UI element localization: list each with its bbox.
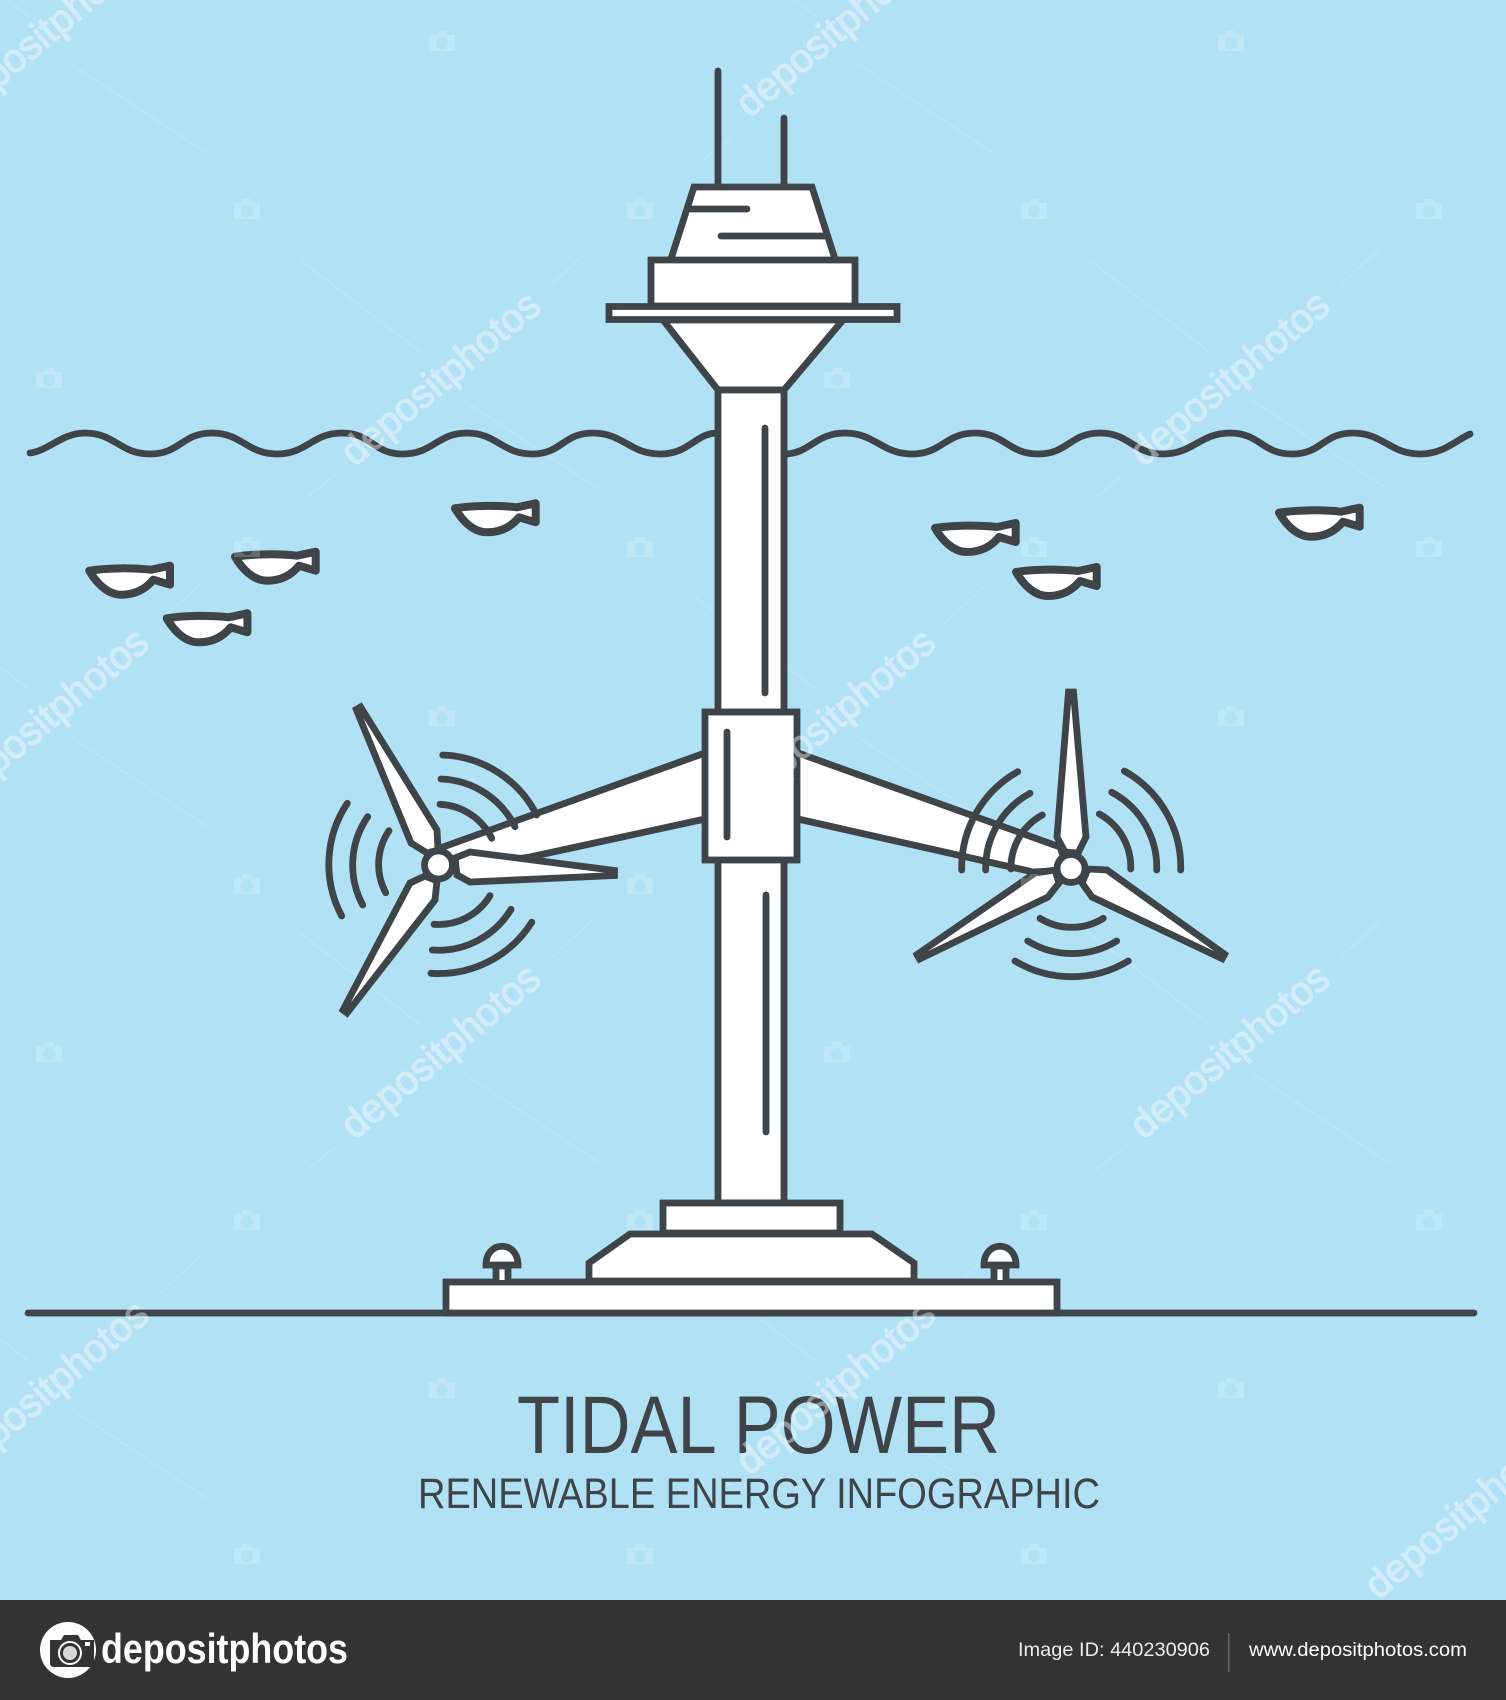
fish 1: [89, 566, 170, 595]
footer divider: [1228, 1633, 1230, 1672]
website url: www.depositphotos.com: [1248, 1639, 1467, 1661]
subtitle: RENEWABLE ENERGY INFOGRAPHIC: [418, 1470, 1100, 1518]
footer logo wordmark: depositphotos: [101, 1625, 348, 1672]
left arm: [440, 753, 705, 870]
fish 5: [935, 523, 1016, 552]
right turbine blades: [917, 692, 1225, 959]
fish 4: [455, 503, 536, 532]
tidal turbine illustration: [28, 71, 1474, 1313]
fish group: [89, 503, 1360, 642]
right arm: [798, 753, 1068, 872]
watermark text: depositphotos: [1121, 283, 1338, 474]
image id: Image ID: 440230906: [1018, 1639, 1210, 1661]
left turbine blades: [343, 707, 614, 1013]
watermark text: depositphotos: [727, 1292, 944, 1483]
left turbine rotation arcs: [329, 755, 537, 974]
bolt left: [486, 1246, 518, 1280]
funnel under deck: [663, 320, 843, 390]
sea floor line: [28, 1310, 1474, 1316]
right turbine rotation arcs: [962, 771, 1181, 977]
sea surface wave right: [784, 433, 1470, 454]
watermark text: depositphotos: [332, 283, 549, 474]
watermark text: depositphotos: [332, 956, 549, 1147]
sea surface wave left: [30, 433, 718, 454]
control house top: [670, 187, 836, 262]
right turbine: [798, 692, 1225, 977]
right turbine hub: [1057, 854, 1085, 882]
base step middle: [589, 1234, 914, 1281]
fish 6: [1016, 567, 1097, 596]
deck plate: [609, 306, 897, 320]
watermark text: depositphotos: [1121, 956, 1338, 1147]
fish 3: [167, 613, 247, 642]
antennas: [718, 71, 784, 187]
deck block: [651, 260, 855, 306]
bolt right: [984, 1246, 1016, 1280]
base slab: [446, 1282, 1057, 1313]
left turbine hub: [424, 851, 452, 879]
central turbine housing: [705, 712, 797, 860]
footer bar: [0, 1600, 1506, 1700]
title: TIDAL POWER: [517, 1380, 1000, 1471]
watermark text: depositphotos: [727, 620, 944, 811]
left turbine: [329, 707, 705, 1013]
fish 2: [235, 552, 316, 581]
tower column: [718, 390, 784, 1203]
fish 7: [1279, 508, 1360, 537]
footer logo icon: camera: [40, 1622, 96, 1678]
base step top: [663, 1203, 840, 1233]
